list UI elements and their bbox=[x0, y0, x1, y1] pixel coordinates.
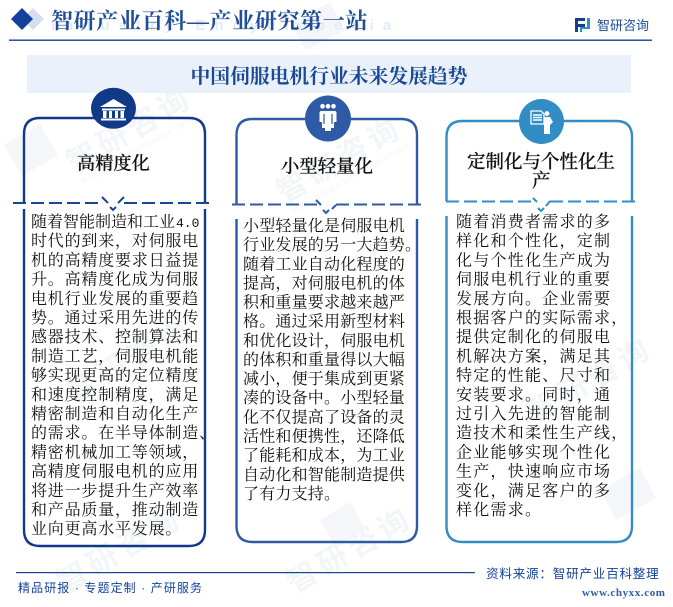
body text: 机解决方案，满足其 bbox=[456, 347, 611, 365]
header title: 智研产业百科—产业研究第一站 bbox=[51, 8, 368, 34]
body text: 势。通过采用先进的传 bbox=[31, 309, 199, 327]
background watermarks: 智研咨询 bbox=[61, 81, 199, 180]
body text: 制造工艺，伺服电机能 bbox=[31, 347, 199, 365]
body text: 格。通过采用新型材料 bbox=[243, 313, 405, 331]
footer slogan: 精品研报 · 专题定制 · 产研服务 bbox=[18, 580, 203, 595]
background watermarks: 智研咨询 bbox=[61, 311, 199, 410]
body text: 时代的到来，对伺服电 bbox=[31, 232, 199, 250]
body text: 的需求。在半导体制造、 bbox=[31, 424, 216, 442]
body text: 业向更高水平发展。 bbox=[31, 519, 182, 538]
background watermarks: Industry Encyclopedia bbox=[51, 17, 400, 34]
panel: high precision bbox=[13, 88, 221, 546]
body text: 高精度伺服电机的应用 bbox=[31, 462, 199, 481]
background watermarks: INTELLIGENCE RESEARCH GROUP bbox=[80, 111, 202, 187]
body text: 凑的设备中。小型轻量 bbox=[243, 389, 405, 407]
body text: 够实现更高的定位精度 bbox=[31, 366, 199, 385]
body text: 生产，快速响应市场 bbox=[456, 463, 611, 481]
body text: 提高，对伺服电机的体 bbox=[243, 273, 405, 292]
panel: miniaturization bbox=[232, 96, 425, 542]
header logo: 智研咨询 bbox=[597, 18, 649, 33]
divider notch bbox=[533, 198, 550, 211]
body text: 了能耗和成本，为工业 bbox=[243, 447, 405, 465]
body text: 精密制造和自动化生产 bbox=[31, 405, 199, 423]
body text: 特定的性能、尺寸和 bbox=[456, 367, 611, 385]
body text: 4.0 bbox=[176, 216, 199, 231]
body text: 企业能够实现个性化 bbox=[456, 443, 611, 461]
divider notch bbox=[316, 200, 336, 213]
dashed divider bbox=[232, 204, 422, 206]
body text: 减小，便于集成到更紧 bbox=[243, 370, 405, 388]
body text: 自动化和智能制造提供 bbox=[243, 465, 406, 484]
card outline bbox=[24, 118, 205, 546]
divider notch bbox=[102, 197, 124, 210]
body text: 的体积和重量得以大幅 bbox=[243, 351, 405, 369]
body text: 和优化设计，伺服电机 bbox=[243, 332, 405, 350]
body text: 了有力支持。 bbox=[243, 485, 340, 503]
heading: 定制化与个性化生 bbox=[467, 152, 615, 173]
background watermarks: INTELLIGENCE RESEARCH GROUP bbox=[290, 141, 412, 217]
title banner: 中国伺服电机行业未来发展趋势 bbox=[190, 66, 468, 88]
dashed divider bbox=[13, 202, 214, 204]
body text: 行业发展的另一大趋势。 bbox=[243, 236, 421, 254]
body text: 和产品质量，推动制造 bbox=[31, 501, 199, 519]
icon: document and presenter bbox=[519, 99, 564, 144]
body text: 变化，满足客户的多 bbox=[456, 482, 611, 500]
background watermarks: 智研咨询 bbox=[271, 111, 409, 210]
footer url: www.chyxx.com bbox=[582, 587, 666, 599]
body text: 安装要求。同时，通 bbox=[456, 386, 611, 404]
body text: 升。高精度化成为伺服 bbox=[31, 270, 199, 289]
body text: 随着消费者需求的多 bbox=[456, 213, 611, 231]
heading: 产 bbox=[532, 171, 551, 192]
body text: 造技术和柔性生产线， bbox=[456, 424, 629, 442]
body text: 将进一步提升生产效率 bbox=[31, 481, 199, 500]
dashed divider bbox=[446, 200, 639, 202]
panel: customization bbox=[446, 99, 639, 542]
body text: 小型轻量化是伺服电机 bbox=[243, 217, 405, 235]
body text: 化不仅提高了设备的灵 bbox=[243, 407, 405, 426]
footer source: 资料来源：智研产业百科整理 bbox=[486, 567, 659, 581]
body text: 随着智能制造和工业 bbox=[31, 213, 175, 231]
heading bbox=[467, 152, 615, 192]
header rule bbox=[9, 40, 652, 41]
body text: 样化需求。 bbox=[456, 501, 542, 519]
body text: 和速度控制精度，满足 bbox=[31, 386, 199, 404]
card outline bbox=[446, 121, 632, 542]
body text: 电机行业发展的重要趋 bbox=[31, 290, 199, 308]
background watermarks: 智研咨询 bbox=[521, 331, 659, 430]
body text: 样化和个性化，定制 bbox=[456, 232, 611, 250]
body text: 积和重量要求越来越严 bbox=[243, 294, 405, 312]
background watermarks: 智研咨询 bbox=[281, 501, 419, 600]
header: diamond icon bbox=[11, 8, 44, 30]
body text: 活性和便携性，还降低 bbox=[243, 428, 405, 446]
body text: 感器技术、控制算法和 bbox=[31, 328, 199, 346]
title banner bbox=[27, 55, 631, 93]
heading: 高精度化 bbox=[77, 154, 150, 174]
body text: 过引入先进的智能制 bbox=[456, 405, 611, 423]
footer rule bbox=[16, 572, 475, 573]
body text: 伺服电机行业的重要 bbox=[456, 271, 611, 289]
body text: 随着工业自动化程度的 bbox=[243, 255, 405, 273]
body text: 化与个性化生产成为 bbox=[456, 251, 611, 269]
body text: 根据客户的实际需求， bbox=[456, 309, 629, 327]
body text: 提供定制化的伺服电 bbox=[456, 327, 611, 346]
icon: bank building bbox=[91, 88, 136, 129]
card outline bbox=[236, 119, 417, 542]
body text: 精密机械加工等领域， bbox=[31, 443, 199, 461]
icon: group of people bbox=[305, 96, 351, 142]
body text: 发展方向。企业需要 bbox=[456, 290, 611, 308]
background watermarks: 智研咨询 bbox=[51, 501, 189, 600]
body text: 机的高精度要求日益提 bbox=[31, 250, 199, 269]
heading: 小型轻量化 bbox=[281, 156, 373, 176]
